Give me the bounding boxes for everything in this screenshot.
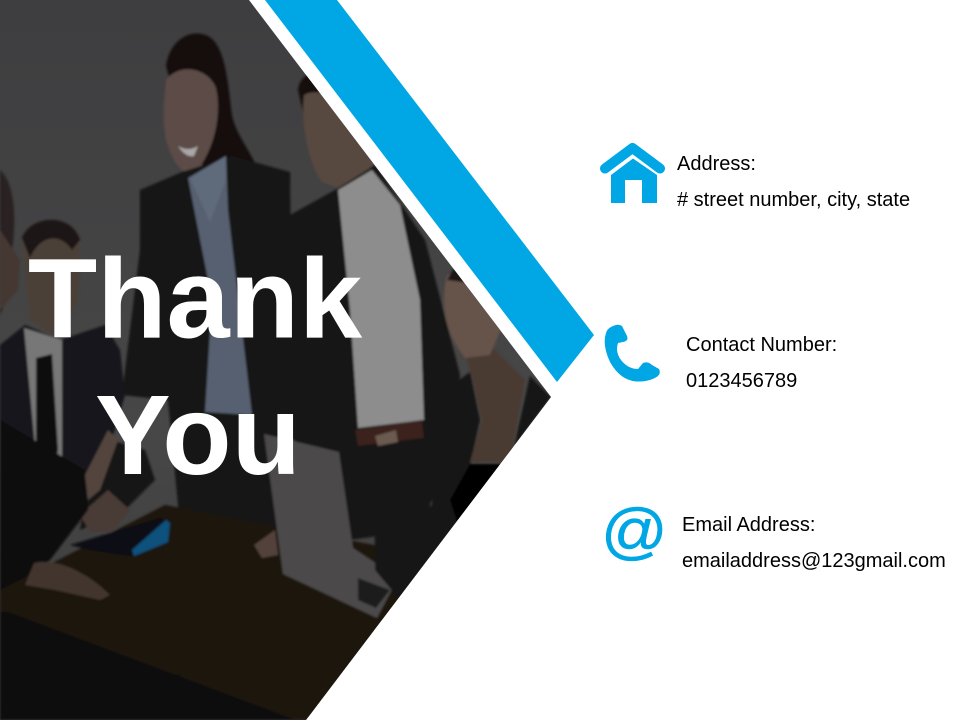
seated woman right bbox=[375, 262, 551, 600]
person in foreground left bbox=[0, 170, 118, 600]
blue diagonal band bbox=[265, 0, 594, 382]
woman in centre bbox=[122, 34, 292, 530]
text block: address: # street number, city, state bbox=[677, 189, 910, 211]
seated man bbox=[0, 220, 155, 532]
hand on table bbox=[25, 562, 110, 600]
icon: house bbox=[605, 148, 660, 203]
text block: address: Address: bbox=[677, 153, 756, 175]
icon: telephone bbox=[605, 325, 660, 382]
text block: email address: Email Address: bbox=[682, 514, 815, 536]
text block: address bbox=[677, 153, 910, 211]
title: Thank You: Thank bbox=[28, 236, 363, 362]
title: Thank You bbox=[28, 236, 363, 499]
woman on right, standing bbox=[278, 72, 460, 540]
laptop bbox=[264, 434, 398, 618]
text block: contact number bbox=[686, 334, 837, 392]
conference table bbox=[0, 504, 399, 720]
text block: email address: emailaddress@123gmail.com bbox=[682, 550, 946, 572]
text block: contact number: Contact Number: bbox=[686, 334, 837, 356]
icon: at sign: @ bbox=[601, 496, 668, 566]
title: Thank You: You bbox=[95, 372, 301, 499]
hand on table middle bbox=[254, 530, 278, 558]
folder with blue edge bbox=[70, 518, 170, 556]
photo panel: business meeting bbox=[0, 0, 560, 720]
text block: email address bbox=[682, 514, 946, 572]
text block: contact number: 0123456789 bbox=[686, 370, 797, 392]
